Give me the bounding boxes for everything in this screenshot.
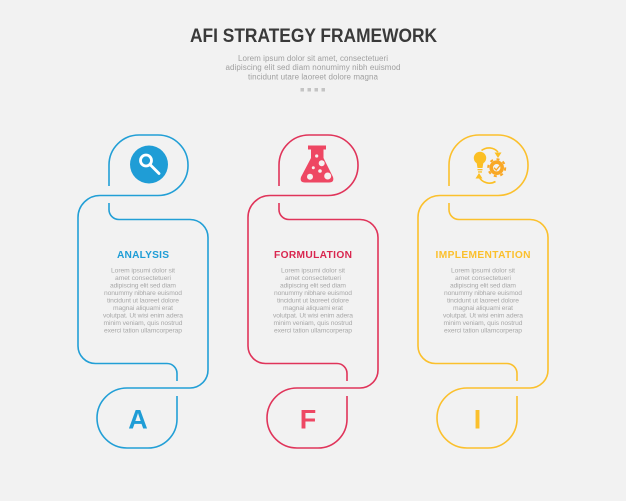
panel: analysis xyxy=(78,135,208,448)
body text: implementation: adipiscing elit sed diam xyxy=(450,282,516,290)
body text: formulation: minim veniam, quis nostrud xyxy=(274,320,353,327)
body text: analysis: minim veniam, quis nostrud xyxy=(104,320,183,327)
title: AFI STRATEGY FRAMEWORK xyxy=(190,25,437,47)
body text: implementation: nonummy nibhare euismod xyxy=(444,290,522,297)
body text: implementation: tincidunt ut laoreet dolore xyxy=(447,298,519,304)
body text: implementation: volutpat. Ut wisi enim adera xyxy=(443,312,523,320)
body text: formulation: adipiscing elit sed diam xyxy=(280,282,346,290)
icon: magnifying glass xyxy=(130,146,168,184)
subtitle text: adipiscing elit sed diam nonumimy nibh euismod xyxy=(226,63,400,72)
heading: analysis: ANALYSIS xyxy=(117,250,169,261)
letter: I: I xyxy=(474,404,481,434)
body text: analysis: magnai aliquami erat xyxy=(113,305,173,312)
body text: formulation: magnai aliquami erat xyxy=(283,305,343,312)
pagination dots xyxy=(300,88,325,92)
subtitle text: Lorem ipsum dolor sit amet, consectetueri xyxy=(238,54,388,63)
body text: analysis: Lorem ipsumi dolor sit xyxy=(111,268,175,274)
body text: formulation: tincidunt ut laoreet dolore xyxy=(277,298,349,304)
body text: analysis xyxy=(103,268,183,334)
body text: formulation: Lorem ipsumi dolor sit xyxy=(281,268,345,274)
body text: analysis: tincidunt ut laoreet dolore xyxy=(107,298,179,304)
heading: implementation: IMPLEMENTATION xyxy=(436,250,530,261)
outline: formulation lower xyxy=(267,203,378,448)
letter: F: F xyxy=(300,404,316,434)
body text: analysis: nonummy nibhare euismod xyxy=(104,290,182,297)
body text: analysis: exerci tation ullamcorperap xyxy=(104,328,182,334)
outline: analysis upper xyxy=(78,135,188,381)
body text: implementation: amet consectetueri xyxy=(455,275,512,282)
body text: implementation: magnai aliquami erat xyxy=(453,305,513,312)
body text: formulation: amet consectetueri xyxy=(285,275,342,282)
outline: implementation lower xyxy=(437,203,548,448)
body text: analysis: volutpat. Ut wisi enim adera xyxy=(103,312,183,320)
body text: implementation: exerci tation ullamcorperap xyxy=(444,328,522,334)
panel: formulation xyxy=(248,135,378,448)
body text: analysis: adipiscing elit sed diam xyxy=(110,282,176,290)
outline: analysis lower xyxy=(97,203,208,448)
letter: A: A xyxy=(128,404,148,434)
body text: implementation: Lorem ipsumi dolor sit xyxy=(451,268,515,274)
icon: flask xyxy=(301,146,333,182)
body text: formulation: volutpat. Ut wisi enim adera xyxy=(273,312,353,320)
icon: bulb, gear and cycle arrows xyxy=(474,148,505,183)
body text: implementation xyxy=(443,268,523,334)
body text: formulation: exerci tation ullamcorperap xyxy=(274,328,352,334)
heading: formulation: FORMULATION xyxy=(274,250,352,261)
body text: implementation: minim veniam, quis nostrud xyxy=(444,320,523,327)
body text: analysis: amet consectetueri xyxy=(115,275,172,282)
subtitle text xyxy=(226,54,400,82)
body text: formulation xyxy=(273,268,353,334)
outline: implementation upper xyxy=(418,135,528,381)
outline: formulation upper xyxy=(248,135,358,381)
body text: formulation: nonummy nibhare euismod xyxy=(274,290,352,297)
subtitle text: tincidunt utare laoreet dolore magna xyxy=(248,72,379,82)
panel: implementation xyxy=(418,135,548,448)
